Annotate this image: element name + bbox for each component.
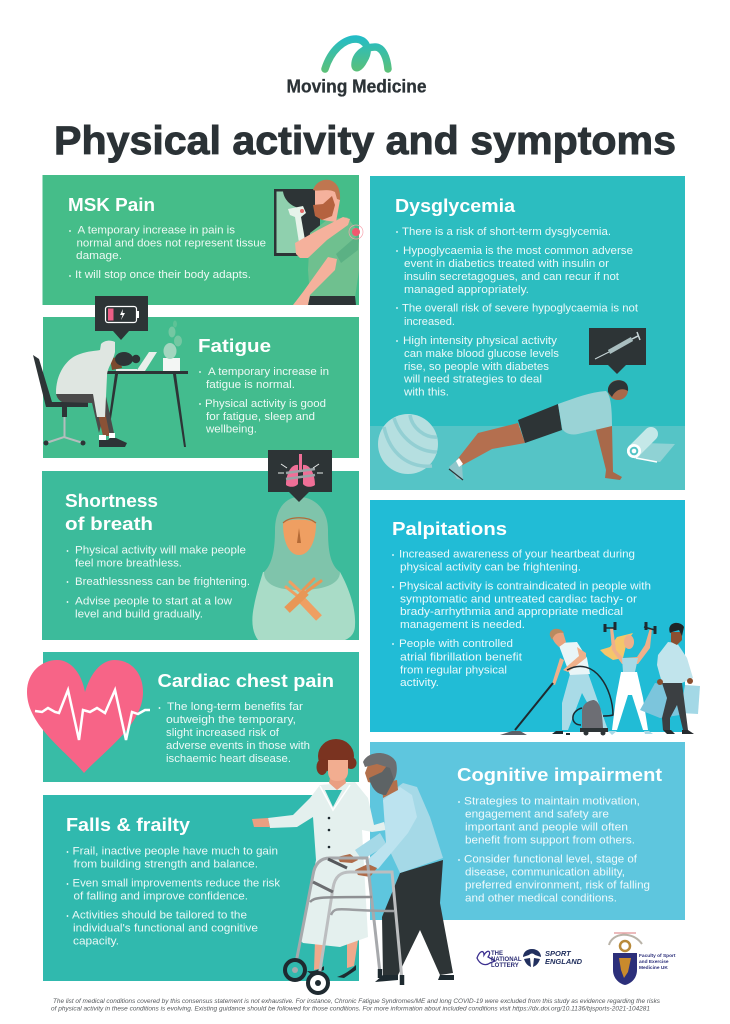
panel: cognitive impairment — [370, 742, 685, 920]
text block: fatigue bullets: Physical activity is good — [205, 398, 326, 410]
text block: cardiac chest pain bullets: ischaemic heart disease. — [166, 753, 291, 765]
text block: dysglycemia bullets — [396, 226, 638, 398]
logos: National Lottery and Sport England — [477, 949, 583, 969]
text block: dysglycemia bullets: can make blood glucose levels — [404, 348, 560, 360]
illustration: person carrying shopping bags — [640, 623, 700, 734]
illustration: tired person at laptop — [56, 341, 157, 447]
text block: palpitations bullets: activity. — [400, 677, 439, 689]
text block: MSK pain bullets: damage. — [76, 250, 122, 262]
text block: palpitations bullets: brady-arrhythmia and appropriate medical — [400, 606, 623, 618]
text block: palpitations bullets: management is needed. — [400, 619, 525, 631]
logos: National Lottery and Sport England: THE — [491, 951, 503, 957]
logos: National Lottery and Sport England: LOTTERY — [491, 963, 519, 969]
text block: fatigue bullets: wellbeing. — [205, 424, 257, 436]
text block: dysglycemia bullets: increased. — [404, 316, 455, 328]
logos: National Lottery and Sport England: ENGLAND — [545, 957, 583, 966]
text block: cognitive impairment bullets — [458, 796, 650, 904]
icon: syringe speech bubble — [589, 328, 646, 374]
text block: cognitive impairment bullets: Strategies to maintain motivation, — [464, 796, 640, 808]
logo: Moving Medicine: Moving Medicine — [286, 76, 426, 96]
text block: dysglycemia bullets: will need strategies to deal — [403, 374, 542, 386]
icon: x-ray frame — [274, 189, 320, 256]
illustration: plant on desk — [163, 320, 182, 371]
logos: National Lottery and Sport England: SPORT — [545, 949, 572, 958]
illustration: doctor — [252, 739, 386, 978]
illustration: older man with walking frame — [337, 753, 454, 982]
text block: falls and frailty bullets: Even small improvements reduce the risk — [72, 878, 281, 890]
panel: dysglycemia — [370, 176, 685, 490]
illustration: chair — [33, 355, 88, 446]
illustration: person vacuuming — [500, 629, 613, 736]
footnote: of physical activity in these conditions is evolving. Existing guidance should be followed for those conditions. For more information about included conditions visit https://dx.doi.org/10.1136/bjsports-2021-104281 — [51, 1006, 650, 1012]
text block: palpitations bullets — [392, 548, 651, 689]
text block: cardiac chest pain bullets: slight increased risk of — [166, 727, 280, 739]
heading: cardiac chest pain: Cardiac chest pain — [158, 671, 334, 691]
heading: cognitive impairment: Cognitive impairment — [457, 765, 662, 785]
illustration: desk — [107, 371, 188, 447]
text block: cognitive impairment bullets: benefit from support from others. — [465, 834, 635, 846]
text block: shortness of breath bullets — [67, 544, 250, 620]
text block: falls and frailty bullets: capacity. — [73, 936, 119, 948]
text block: dysglycemia bullets: rise, so people with diabetes — [404, 361, 550, 373]
heading: shortness of breath: of breath — [65, 514, 153, 534]
text block: MSK pain bullets — [69, 224, 266, 281]
text block: cognitive impairment bullets: disease, communication ability, — [465, 866, 625, 878]
text block: dysglycemia bullets: insulin secretagogues, and can recur if not — [404, 271, 619, 283]
text block: cognitive impairment bullets: important and people will often — [465, 822, 628, 834]
panel: fatigue — [33, 296, 359, 458]
icon: exercise ball — [378, 414, 438, 474]
panel: palpitations — [370, 500, 700, 736]
heading: falls and frailty: Falls & frailty — [66, 815, 190, 835]
text block: palpitations bullets: symptomatic and untreated cardiac tachy- or — [400, 594, 637, 606]
text block: cognitive impairment bullets: and other medical conditions. — [465, 892, 617, 904]
text block: dysglycemia bullets: event in diabetics treated with insulin or — [404, 258, 609, 270]
logo: Faculty of Sport and Exercise Medicine crest: Faculty of Sport — [639, 953, 676, 959]
text block: cardiac chest pain bullets — [159, 701, 310, 765]
illustration: person lifting dumbbells — [600, 622, 655, 735]
illustration: walking frame — [285, 858, 402, 993]
text block: dysglycemia bullets: There is a risk of short-term dysglycemia. — [402, 226, 611, 238]
text block: palpitations bullets: Physical activity is contraindicated in people with — [399, 580, 651, 592]
icon: rolled mat — [627, 434, 675, 462]
text block: shortness of breath bullets: Advise people to start at a low — [75, 596, 232, 608]
text block: cognitive impairment bullets: preferred environment, risk of falling — [465, 880, 650, 892]
heading: MSK pain: MSK Pain — [68, 195, 155, 215]
text block: shortness of breath bullets: feel more breathless. — [75, 558, 182, 570]
text block: dysglycemia bullets: managed appropriately. — [404, 284, 529, 296]
text block: falls and frailty bullets: of falling and improve confidence. — [74, 890, 248, 902]
text block: fatigue bullets: A temporary increase in — [208, 366, 329, 378]
title: Physical activity and symptoms — [54, 119, 676, 163]
footnote: The list of medical conditions covered by this consensus statement is not exhaustive. For instance, Chronic Fatigue Syndromes/ME and long COVID-19 were excluded from this study as evidence regarding the risks — [53, 998, 661, 1005]
illustration: person doing plank — [449, 380, 628, 480]
illustration: man holding shoulder — [293, 180, 363, 305]
illustration: woman in hijab with crossed hands — [252, 497, 355, 640]
text block: cardiac chest pain bullets: outweigh the temporary, — [166, 714, 296, 726]
text block: palpitations bullets: atrial fibrillation benefit — [400, 652, 522, 664]
text block: MSK pain bullets: A temporary increase in pain is — [78, 224, 236, 236]
text block: dysglycemia bullets: The overall risk of severe hypoglycaemia is not — [402, 302, 638, 314]
logo: Faculty of Sport and Exercise Medicine crest — [609, 933, 676, 985]
heading: shortness of breath — [65, 491, 158, 534]
text block: dysglycemia bullets: High intensity physical activity — [403, 335, 558, 347]
heading: fatigue: Fatigue — [198, 336, 271, 356]
text block: cardiac chest pain bullets: adverse events in those with — [166, 740, 310, 752]
text block: MSK pain bullets: normal and does not represent tissue — [76, 238, 266, 250]
text block: cognitive impairment bullets: engagement and safety are — [465, 808, 609, 820]
text block: shortness of breath bullets: Breathlessness can be frightening. — [75, 576, 250, 588]
panel: falls and frailty — [43, 739, 454, 993]
panel: shortness of breath — [42, 450, 359, 640]
text block: shortness of breath bullets: Physical activity will make people — [75, 544, 246, 556]
text block: palpitations bullets: People with controlled — [399, 638, 513, 650]
heading: palpitations: Palpitations — [392, 519, 507, 539]
logos: National Lottery and Sport England: NATIONAL — [491, 957, 522, 963]
text block: MSK pain bullets: It will stop once their body adapts. — [75, 269, 251, 281]
footnote — [51, 998, 661, 1012]
heading: dysglycemia: Dysglycemia — [395, 196, 516, 216]
text block: palpitations bullets: Increased awareness of your heartbeat during — [399, 548, 635, 560]
text block: dysglycemia bullets: Hypoglycaemia is the most common adverse — [403, 245, 633, 257]
logo: Moving Medicine — [286, 39, 426, 96]
text block: falls and frailty bullets — [67, 846, 281, 948]
text block: fatigue bullets: fatigue is normal. — [206, 379, 295, 391]
heading: shortness of breath: Shortness — [65, 491, 158, 511]
text block: shortness of breath bullets: level and build gradually. — [75, 608, 203, 620]
text block: fatigue bullets: for fatigue, sleep and — [206, 411, 315, 423]
text block: dysglycemia bullets: with this. — [403, 386, 449, 398]
text block: falls and frailty bullets: Frail, inactive people have much to gain — [72, 846, 278, 858]
text block: falls and frailty bullets: individual's functional and cognitive — [73, 922, 258, 934]
text block: palpitations bullets: from regular physical — [400, 664, 507, 676]
text block: falls and frailty bullets: from building strength and balance. — [74, 858, 258, 870]
text block: cardiac chest pain bullets: The long-term benefits far — [167, 701, 303, 713]
icon: lungs speech bubble — [268, 450, 332, 502]
text block: falls and frailty bullets: Activities should be tailored to the — [72, 910, 247, 922]
panel: MSK pain — [42, 175, 363, 305]
logo: Faculty of Sport and Exercise Medicine crest: Medicine UK — [639, 965, 668, 971]
text block: palpitations bullets: physical activity can be frightening. — [400, 562, 581, 574]
text block: fatigue bullets — [199, 366, 329, 436]
text block: cognitive impairment bullets: Consider functional level, stage of — [464, 854, 638, 866]
icon: low battery speech bubble — [95, 296, 148, 340]
icon: heart with ECG line — [27, 660, 150, 773]
panel: cardiac chest pain — [27, 652, 359, 782]
logo: Faculty of Sport and Exercise Medicine crest: and Exercise — [639, 959, 669, 965]
